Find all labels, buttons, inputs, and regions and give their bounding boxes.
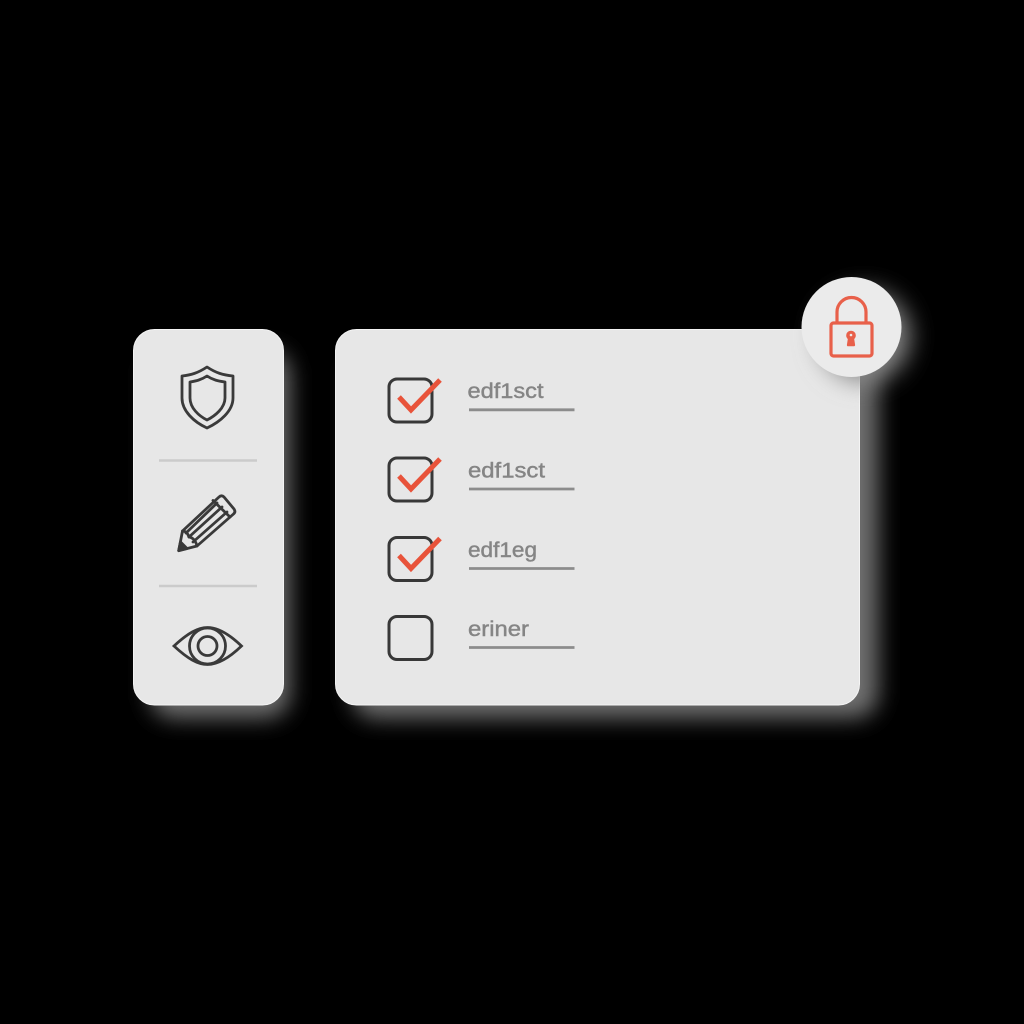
checklist row 3 (389, 538, 574, 580)
checklist row 1 (389, 379, 574, 422)
checklist row 1: edf1sct (468, 380, 544, 403)
icon: eye (174, 628, 242, 664)
icon: shield (182, 367, 233, 428)
checklist row 3: edf1eg (468, 539, 537, 562)
icon: pencil (179, 496, 235, 551)
checklist row 4: eriner (468, 618, 529, 641)
panel: main checklist card (336, 330, 878, 718)
panel: left toolbar (134, 330, 290, 718)
checklist row 4 (389, 616, 574, 660)
icon: padlock (831, 298, 872, 356)
checklist row 2: edf1sct (468, 460, 545, 482)
badge: lock (802, 277, 910, 382)
checklist row 2 (389, 458, 574, 501)
